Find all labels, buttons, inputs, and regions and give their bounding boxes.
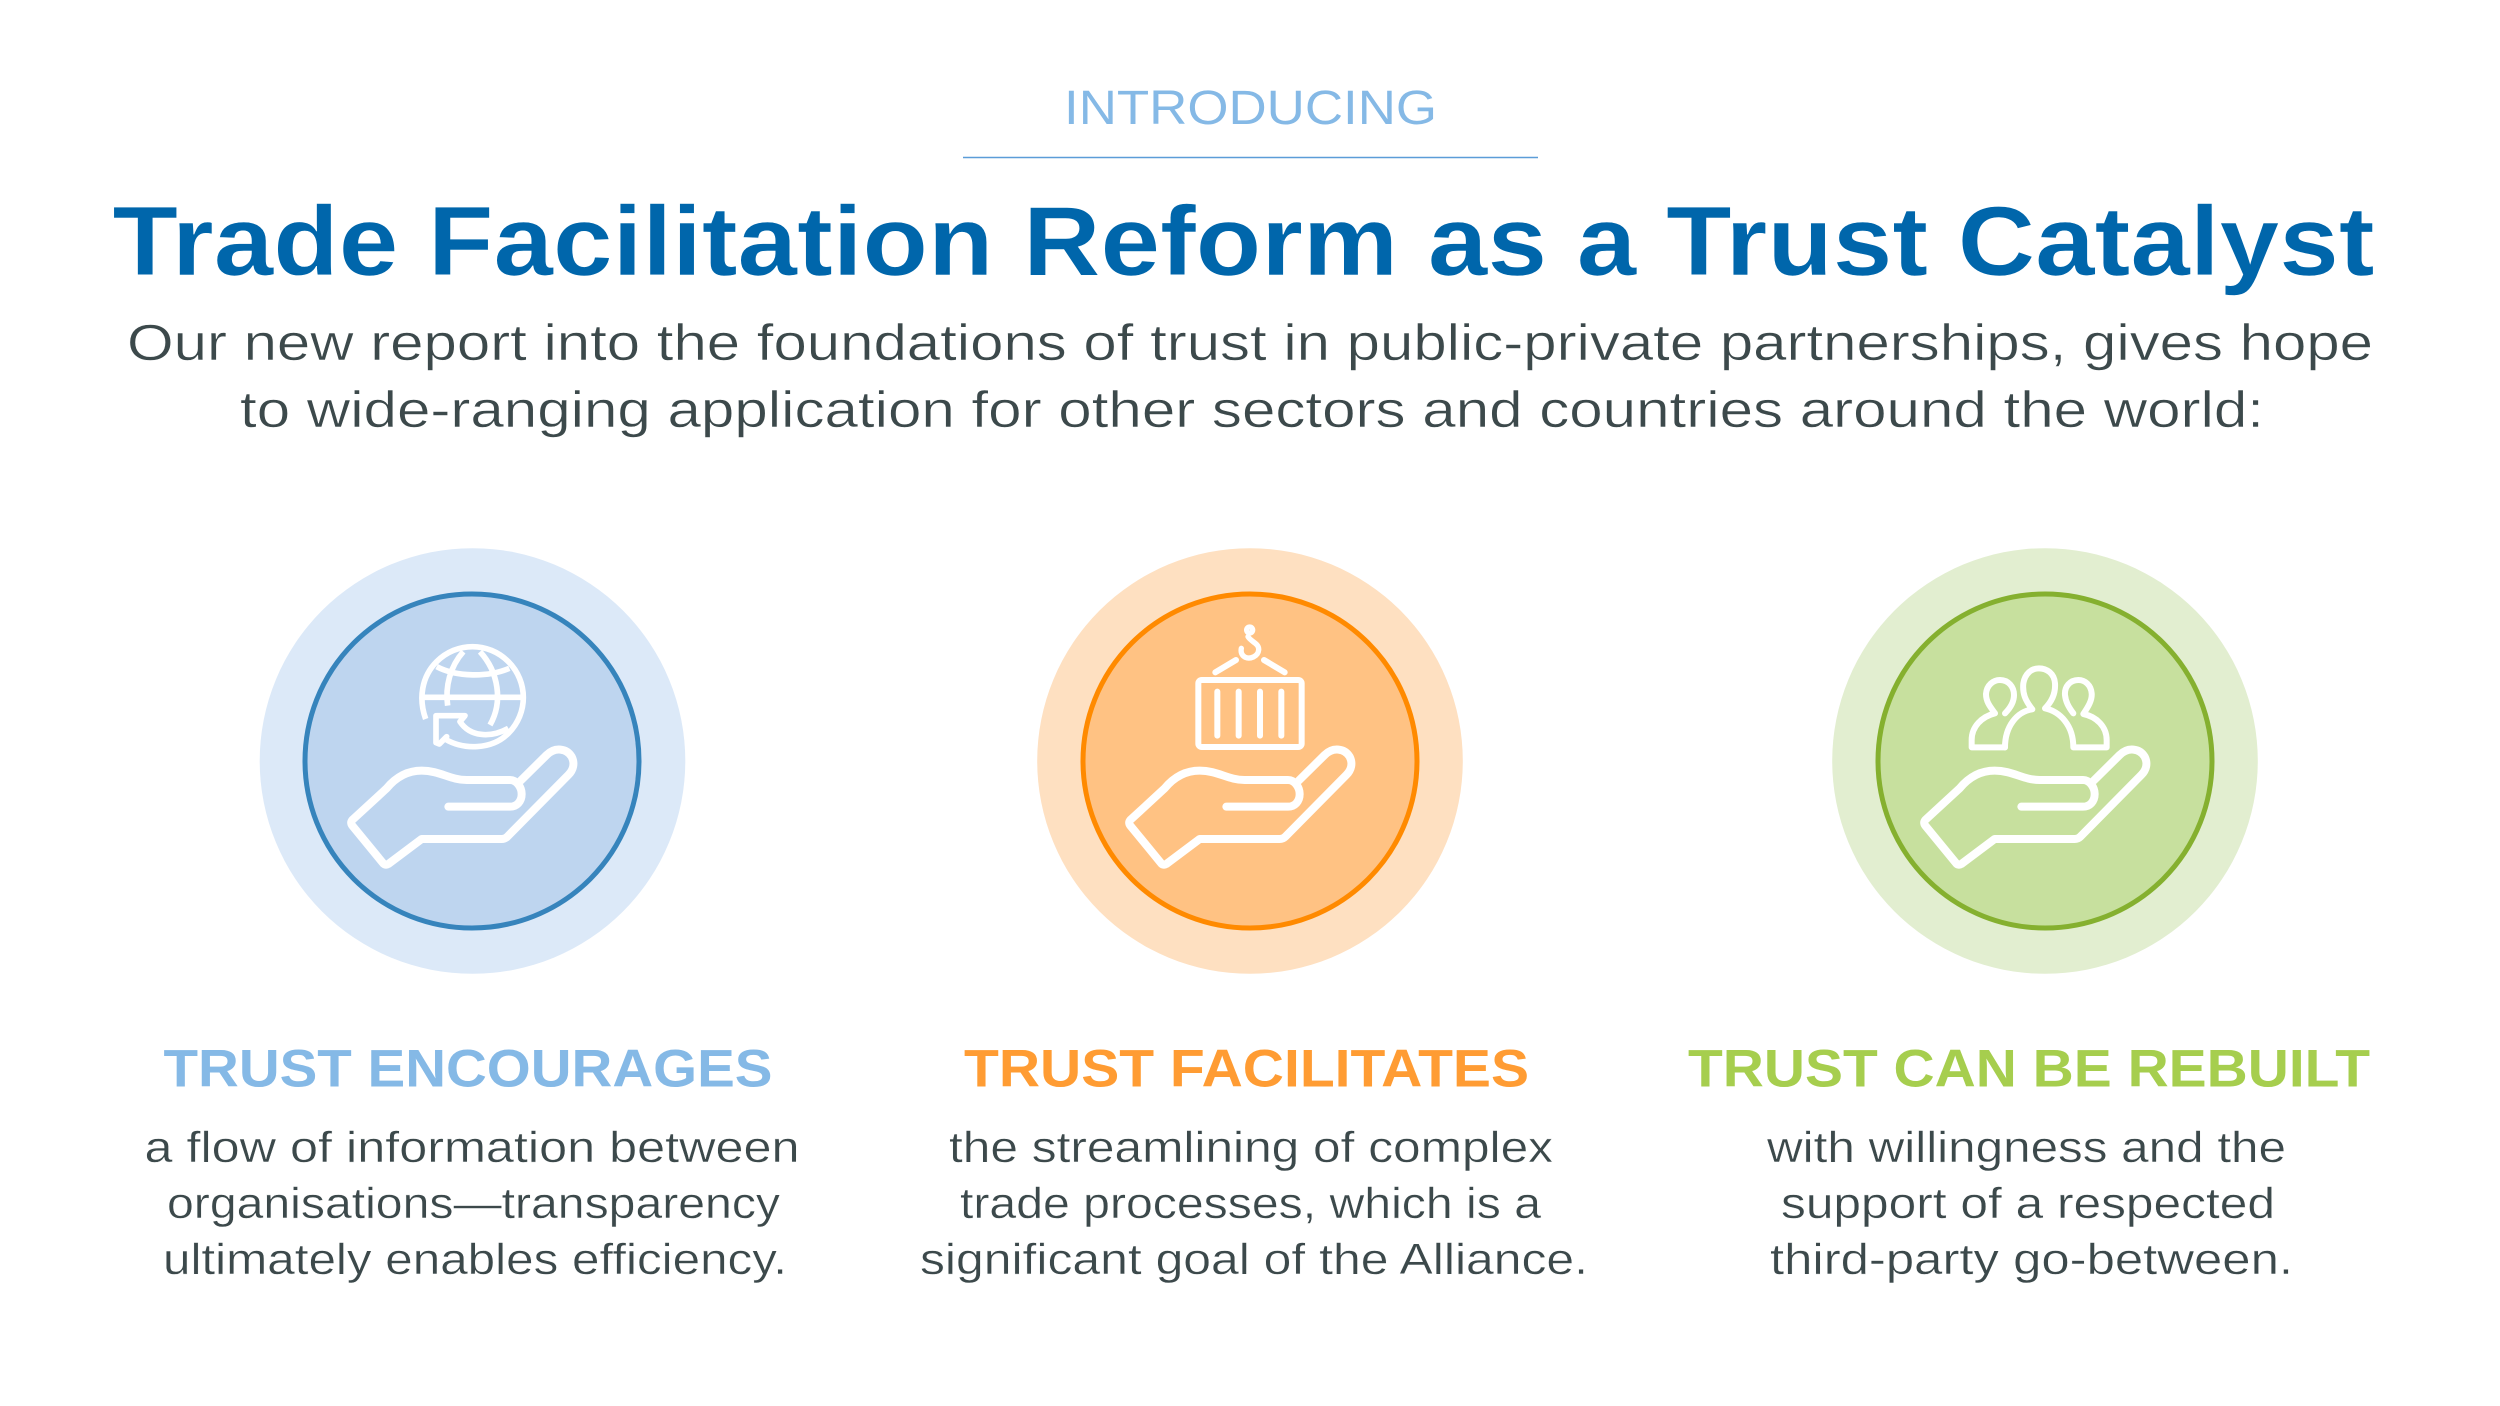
- text: trust facilitates description: significant goal of the Alliance.: [920, 1235, 1588, 1284]
- intro text: to wide-ranging application for other sectors and countries around the world:: [240, 381, 2264, 438]
- icon: hand holding people: [1832, 548, 2258, 974]
- heading: trust can be rebuilt: TRUST CAN BE REBUILT: [1688, 1040, 2370, 1098]
- eyebrow: introducing: INTRODUCING: [1064, 82, 1437, 135]
- text: trust can be rebuilt description: [1766, 1123, 2293, 1284]
- text: trust can be rebuilt description: with willingness and the: [1766, 1123, 2286, 1172]
- text: trust facilitates description: the streamlining of complex: [949, 1123, 1553, 1172]
- heading: trust encourages: TRUST ENCOURAGES: [164, 1040, 772, 1098]
- panel: trust facilitates: [920, 548, 1588, 1284]
- text: trust can be rebuilt description: third-party go-between.: [1770, 1235, 2293, 1284]
- text: trust encourages description: a flow of information between: [144, 1123, 800, 1172]
- title: Trade Facilitation Reform as a Trust Catalyst: [112, 186, 2374, 296]
- text: trust encourages description: [144, 1123, 800, 1284]
- icon: hand holding container: [1037, 548, 1463, 974]
- icon: hand holding globe: [260, 548, 685, 974]
- text: trust encourages description: organisations—transparency: [167, 1179, 780, 1228]
- text: trust encourages description: ultimately enables efficiency.: [163, 1235, 787, 1284]
- text: trust facilitates description: trade processes, which is a: [960, 1179, 1542, 1228]
- intro text: Our new report into the foundations of trust in public-private partnerships, gives hope: [127, 314, 2373, 371]
- heading: trust facilitates: TRUST FACILITATES: [964, 1040, 1529, 1098]
- intro text: [127, 314, 2373, 438]
- text: trust facilitates description: [920, 1123, 1588, 1284]
- text: trust can be rebuilt description: support of a respected: [1781, 1179, 2275, 1228]
- panel: trust encourages: [144, 548, 800, 1284]
- panel: trust can be rebuilt: [1688, 548, 2370, 1284]
